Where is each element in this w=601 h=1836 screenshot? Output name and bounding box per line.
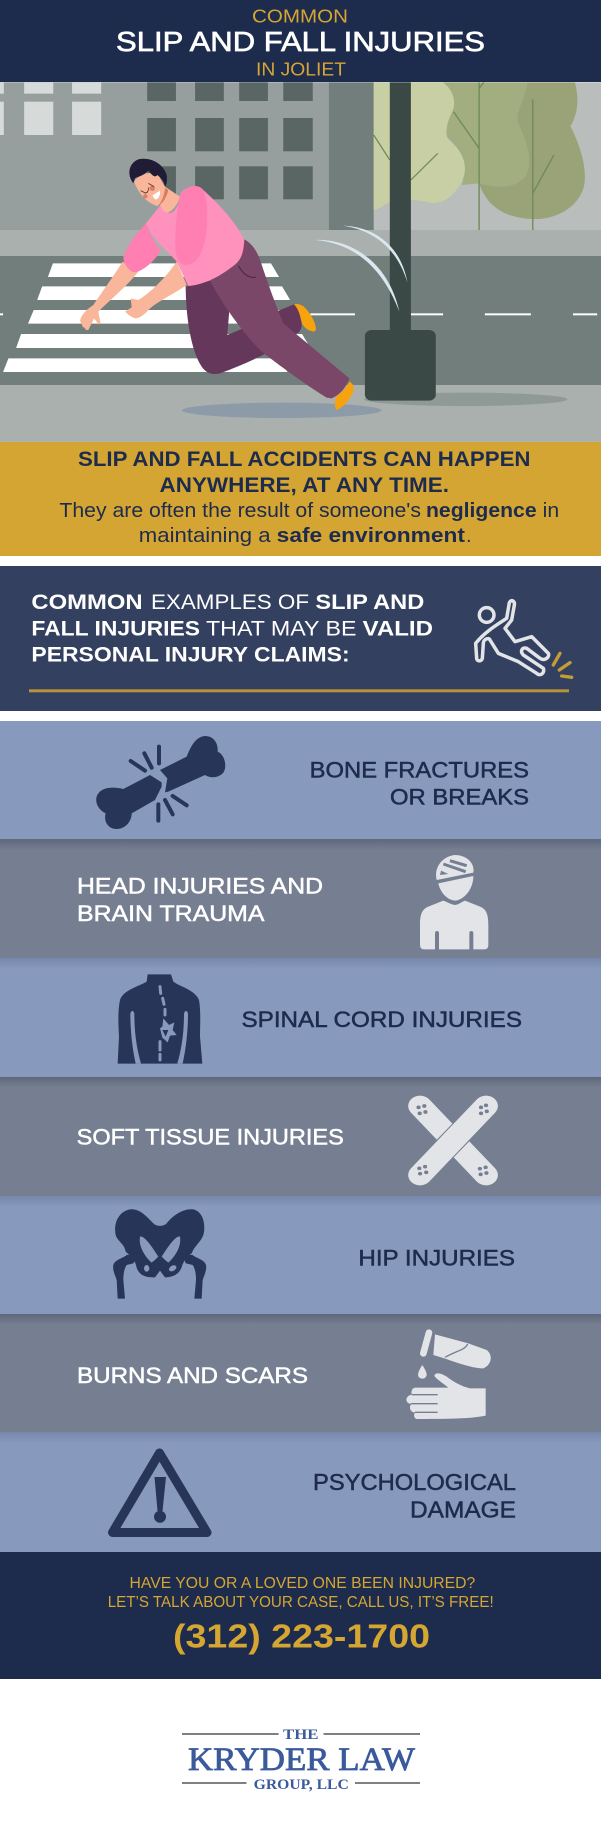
motion swooshes: [315, 226, 407, 312]
shadows: [182, 393, 567, 418]
illustration: man slipping on a street: [0, 82, 601, 442]
callout: gold accidents message: SLIP AND FALL ACCIDENTS CAN HAPPEN: [78, 448, 530, 471]
label: head injuries and brain trauma: BRAIN TRAUMA: [77, 901, 265, 926]
logo: the kryder law group: THE: [283, 1727, 318, 1743]
text block: call to action: HAVE YOU OR A LOVED ONE BEEN INJURED?: [130, 1575, 476, 1592]
callout: gold accidents message: They are often the result of someone's: [59, 500, 421, 522]
label: bone fractures or breaks: [310, 758, 529, 809]
panel: common examples intro: [0, 566, 601, 711]
callout: gold accidents message: maintaining a: [139, 525, 272, 547]
label: psychological damage: DAMAGE: [410, 1497, 516, 1523]
heading: in joliet: IN JOLIET: [256, 59, 346, 80]
text block: common examples heading: FALL INJURIES: [31, 617, 200, 641]
callout: gold accidents message: in: [543, 500, 559, 522]
label: psychological damage: [313, 1469, 516, 1523]
panel: soft tissue injuries: [0, 1077, 601, 1196]
callout: gold accidents message: .: [466, 525, 472, 547]
text block: common examples heading: EXAMPLES OF: [151, 590, 309, 614]
text block: common examples heading: THAT MAY BE: [206, 617, 356, 641]
text block: call to action: [108, 1575, 494, 1611]
logo: the kryder law group: KRYDER LAW: [188, 1742, 416, 1778]
callout: gold accidents message: negligence: [426, 500, 537, 522]
panel: head injuries: [0, 839, 601, 958]
header: title banner: [0, 0, 601, 82]
icon: pelvis: [113, 1209, 206, 1299]
icon: chemical dripping onto hand: [406, 1333, 491, 1419]
text block: common examples heading: VALID: [363, 617, 433, 641]
icon: back with injured spine: [118, 974, 202, 1064]
panel: hip injuries: [0, 1196, 601, 1314]
icon: falling person: [476, 601, 572, 677]
text block: call to action: LET’S TALK ABOUT YOUR CASE, CALL US, IT’S FREE!: [108, 1594, 494, 1611]
label: bone fractures or breaks: OR BREAKS: [390, 784, 529, 809]
label: spinal cord injuries: SPINAL CORD INJURIES: [242, 1007, 522, 1032]
label: head injuries and brain trauma: HEAD INJURIES AND: [77, 873, 323, 898]
street and sidewalks: [0, 230, 601, 442]
label: hip injuries: HIP INJURIES: [358, 1245, 515, 1270]
icon: person with bandaged head: [420, 855, 488, 949]
logo: the kryder law group: [182, 1727, 420, 1793]
panel: bone fractures: [0, 721, 601, 839]
label: bone fractures or breaks: BONE FRACTURES: [310, 758, 529, 783]
panel: burns and scars: [0, 1314, 601, 1432]
callout: gold accidents message: safe environment: [277, 525, 465, 547]
text block: common examples heading: [31, 590, 433, 667]
building: [0, 82, 374, 231]
logo: the kryder law group: GROUP, LLC: [254, 1777, 349, 1793]
panel: psychological damage: [0, 1432, 601, 1552]
text block: common examples heading: PERSONAL INJURY CLAIMS:: [31, 643, 350, 667]
callout: gold accidents message: ANYWHERE, AT ANY TIME.: [160, 474, 449, 497]
icon: crossed bandages: [416, 1103, 489, 1176]
heading: slip and fall injuries: SLIP AND FALL INJURIES: [116, 26, 485, 57]
label: head injuries and brain trauma: [77, 873, 323, 926]
icon: broken bone: [96, 736, 225, 829]
text block: common examples heading: SLIP AND: [315, 590, 424, 614]
footer: call to action: [0, 1552, 601, 1679]
heading: common: COMMON: [252, 6, 348, 27]
label: psychological damage: PSYCHOLOGICAL: [313, 1469, 516, 1495]
falling man: [80, 159, 354, 410]
label: burns and scars: BURNS AND SCARS: [77, 1363, 308, 1388]
callout: gold accidents message: [0, 442, 601, 556]
trees: [374, 82, 585, 230]
phone number: (312) 223-1700: [173, 1618, 430, 1655]
lamp post: [365, 82, 436, 401]
panel: spinal cord injuries: [0, 958, 601, 1077]
label: soft tissue injuries: SOFT TISSUE INJURIES: [77, 1125, 344, 1150]
icon: warning triangle: [112, 1453, 207, 1532]
text block: common examples heading: COMMON: [31, 590, 143, 614]
